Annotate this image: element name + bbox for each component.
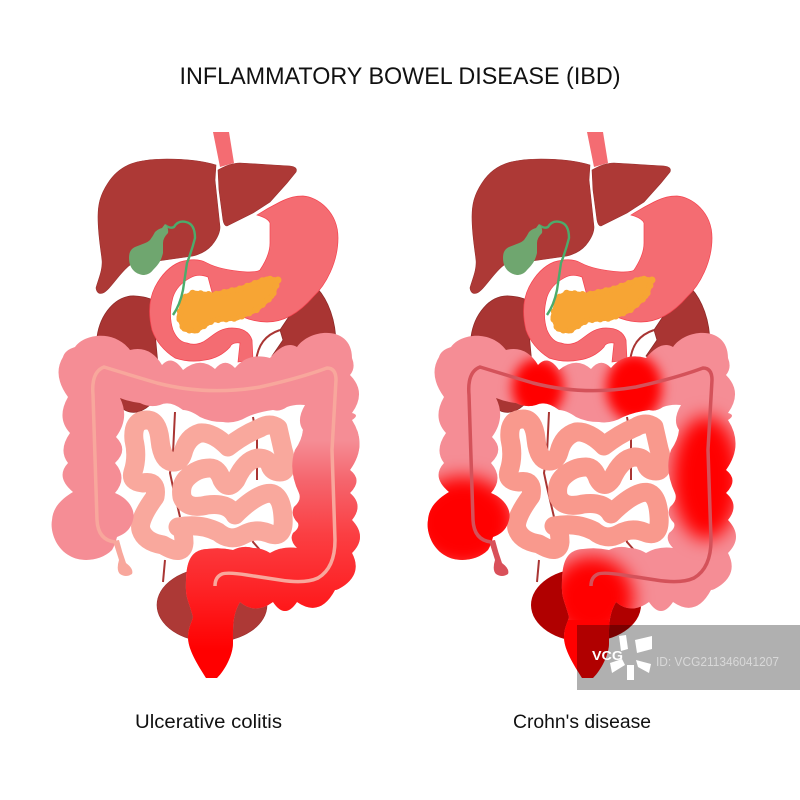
watermark ID text: ID: VCG211346041207 [656,654,779,669]
small intestine [508,419,662,550]
colon lumen line [93,367,336,586]
inflamed patches on colon [411,354,740,690]
watermark logo pinwheel [610,635,652,680]
label: ulcerative colitis: Ulcerative colitis [135,712,282,733]
panel: ulcerative colitis [52,132,370,733]
upper digestive organs: esophagus, liver, stomach, pancreas, gallbladder, kidneys [96,132,338,582]
small intestine [132,420,286,551]
watermark band [577,625,800,690]
label: crohn's disease: Crohn's disease [513,712,651,733]
bladder, dark red [531,568,641,642]
title: INFLAMMATORY BOWEL DISEASE (IBD) [180,63,620,90]
upper digestive organs: esophagus, liver, stomach, pancreas, gallbladder, kidneys [470,132,712,582]
large intestine base [52,333,360,678]
appendix [113,540,132,576]
inflamed descending colon and rectum gradient [186,430,360,678]
large intestine base [428,333,736,678]
watermark VCG text: VCG [592,648,623,663]
colon lumen line [469,367,712,586]
bladder [157,568,267,642]
appendix [489,540,508,576]
panel: crohn's disease [411,132,740,733]
